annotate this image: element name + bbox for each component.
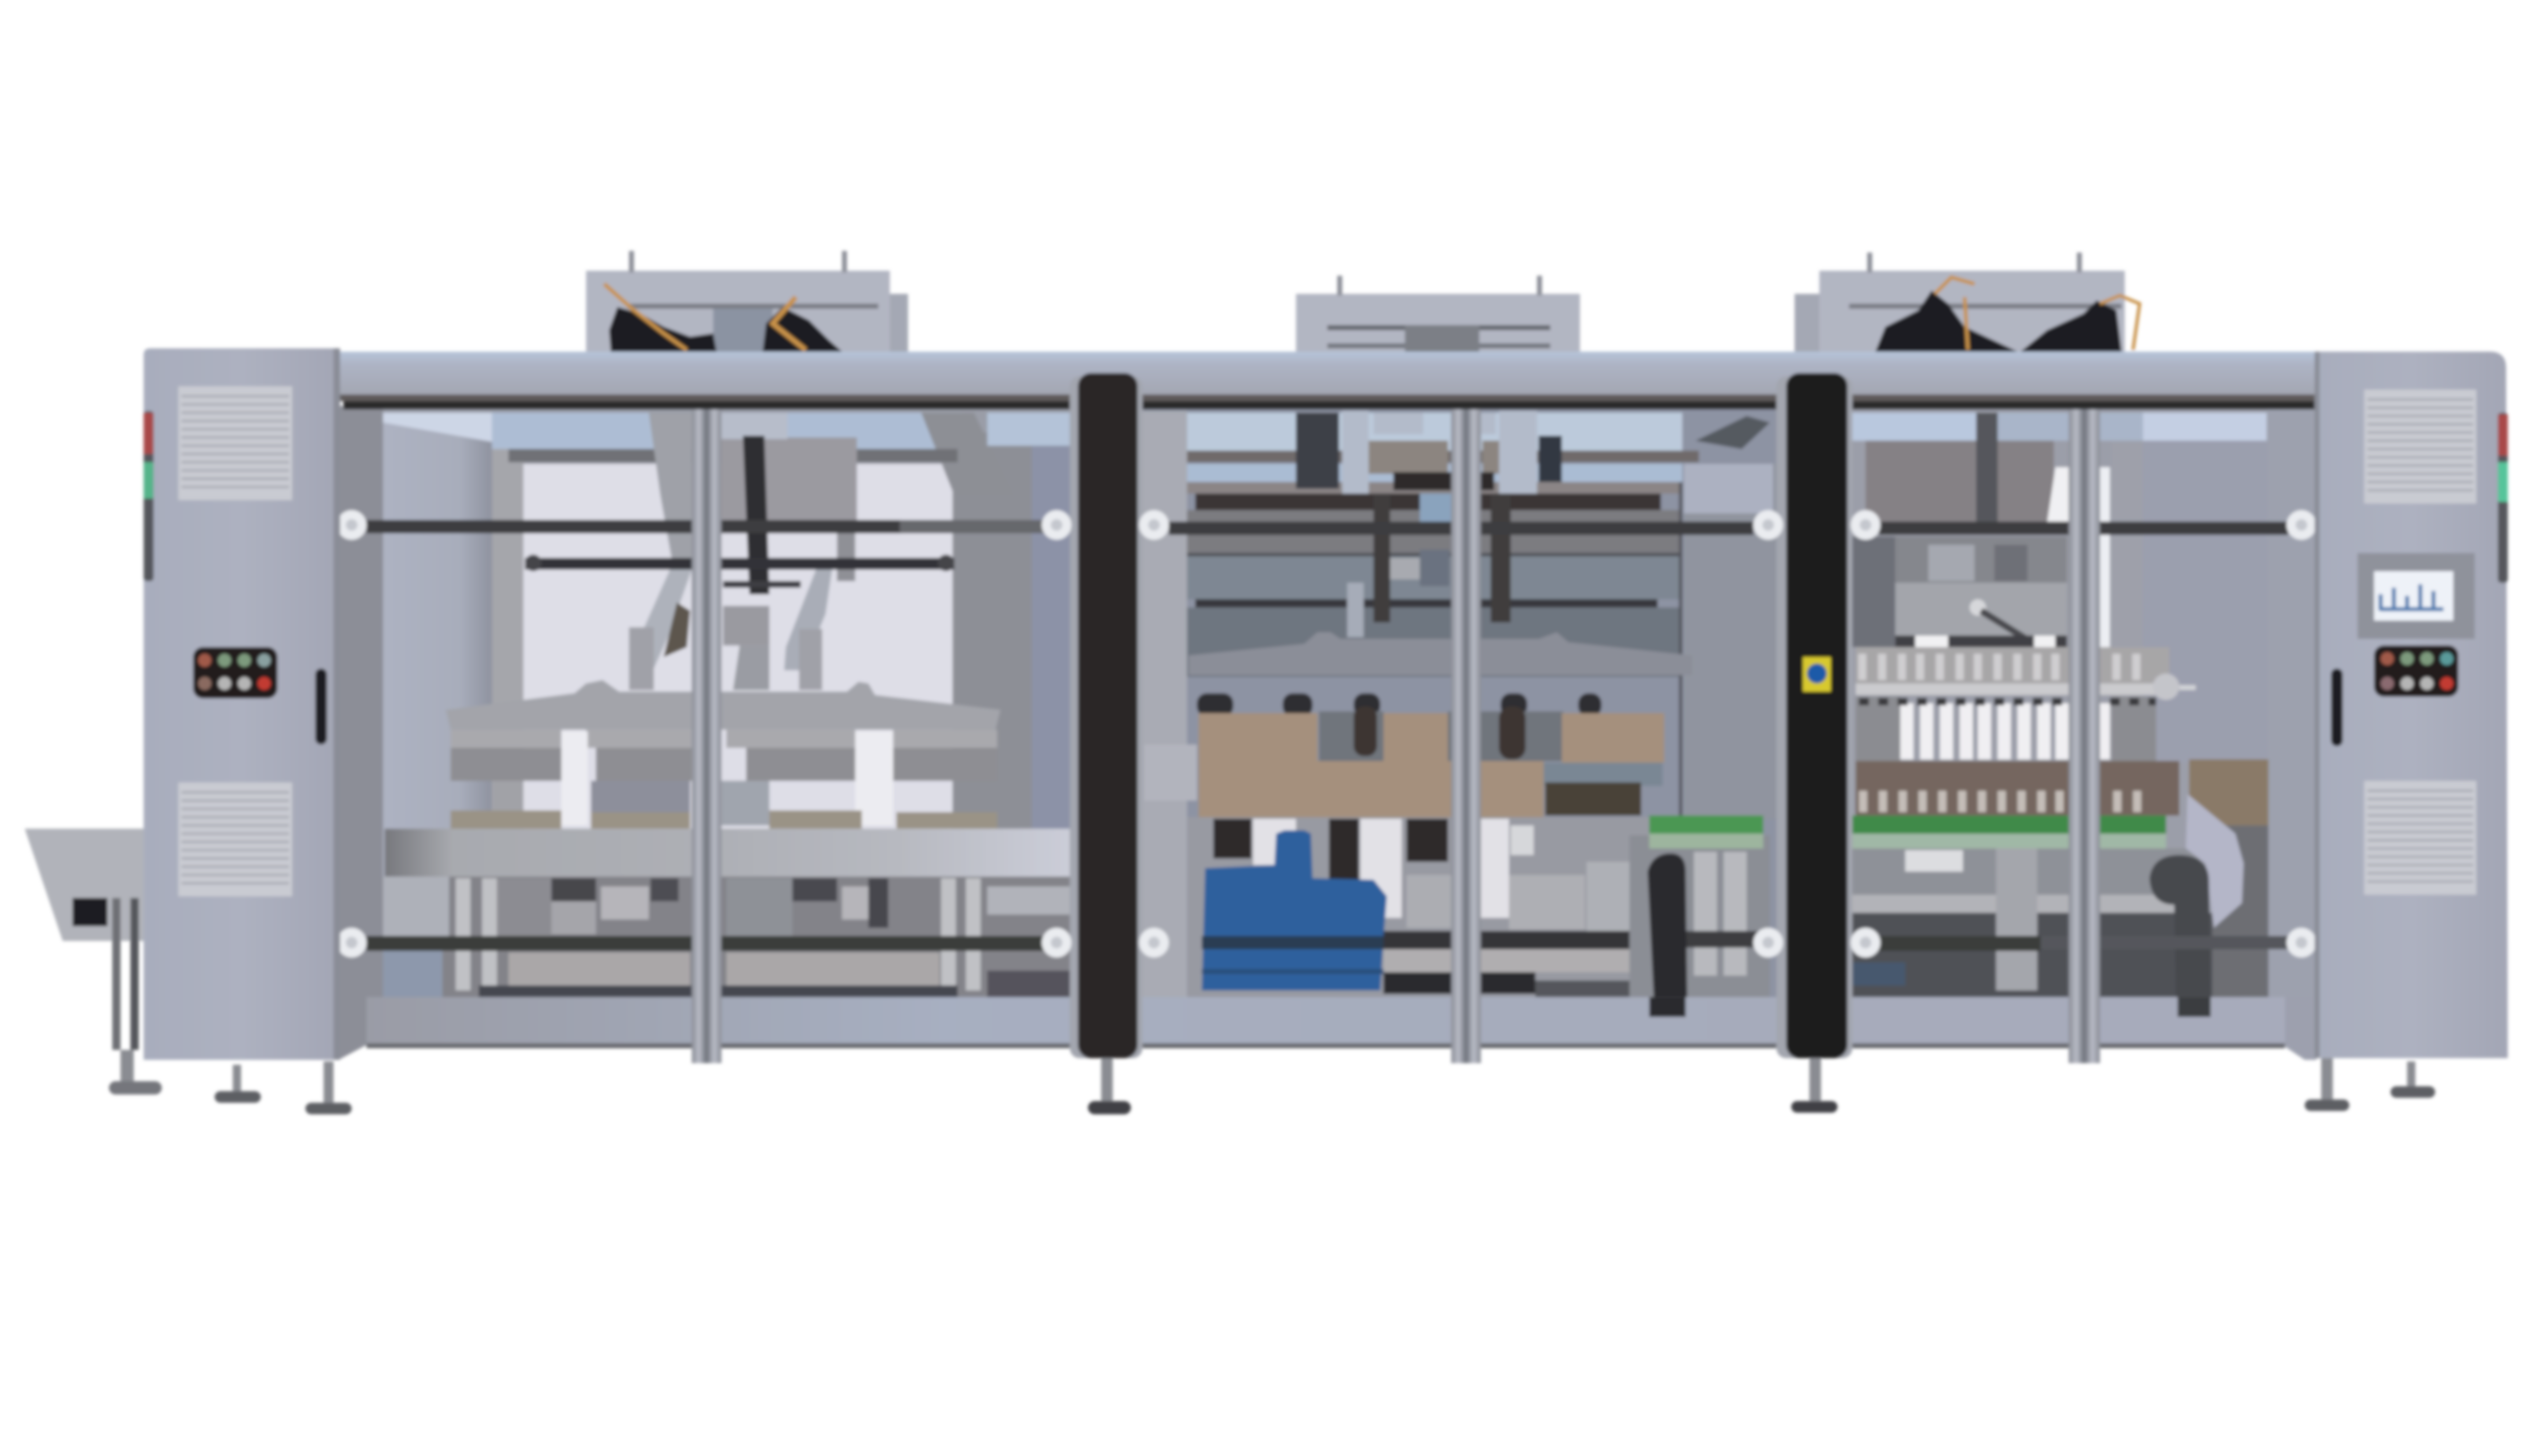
light band	[1853, 895, 2174, 913]
vertical pillars	[692, 410, 2100, 1063]
dark machinery	[1853, 913, 2242, 997]
tooth band	[450, 730, 997, 748]
interior: left section	[338, 406, 1073, 1004]
comb teeth	[1862, 654, 2136, 680]
bolts	[337, 510, 2316, 958]
pale spots	[1859, 791, 2141, 812]
right hopper arm	[837, 525, 855, 581]
brush right lower overlay	[2178, 997, 2210, 1017]
bottom beam	[367, 997, 2285, 1048]
lower machinery	[1853, 848, 2199, 997]
table	[385, 829, 1070, 878]
hopper body	[721, 437, 857, 527]
left cabinet	[144, 348, 340, 1060]
actuator block	[1895, 536, 2067, 583]
dark columns	[1213, 819, 1448, 880]
upper cross bar	[509, 449, 958, 462]
angled plate	[2186, 794, 2244, 928]
top beam	[338, 352, 2320, 410]
top module: right	[1794, 253, 2140, 352]
brush left lower overlay	[1649, 997, 1686, 1017]
right frames	[1630, 835, 1770, 997]
cylinder	[1976, 413, 1998, 523]
lower machinery dark	[1536, 981, 1651, 997]
brown lower	[1856, 761, 2179, 815]
button panel	[193, 647, 278, 698]
left hopper arm	[649, 413, 692, 570]
upper platform	[1189, 632, 1692, 675]
dark box	[1545, 783, 1641, 815]
rod right segment	[2041, 936, 2288, 949]
comb rack band	[1856, 684, 2173, 695]
right wall	[2143, 441, 2267, 763]
door handle	[315, 668, 327, 745]
vertical cylinder	[743, 436, 770, 595]
middle light panel	[1407, 875, 1479, 928]
lower background	[1187, 817, 1682, 999]
lower guard rod	[525, 558, 954, 570]
manifold cluster	[2153, 673, 2179, 700]
vent bottom	[178, 783, 292, 896]
diagonal strut	[1981, 611, 2034, 644]
white gap below platform	[561, 732, 893, 826]
white label box	[1905, 850, 1963, 872]
signal light	[144, 411, 154, 581]
centre lower block	[721, 781, 770, 826]
light top plates	[1342, 411, 1537, 493]
comb hooks	[1859, 701, 2156, 703]
cardboard top	[1199, 713, 1664, 763]
brown carton	[2189, 759, 2269, 826]
slanted strut	[1695, 416, 1770, 449]
linkage arms	[1374, 493, 1390, 622]
lower chain	[1383, 972, 1536, 994]
light column	[1996, 845, 2037, 990]
blue motor piece	[1853, 963, 1905, 985]
pivot	[1970, 599, 1986, 616]
top module: middle	[1296, 276, 1580, 352]
left lower link	[636, 561, 692, 670]
green belt	[1649, 815, 1763, 834]
top module: left	[586, 251, 908, 352]
interior: middle section	[1143, 406, 1790, 1017]
centre lower support	[733, 646, 770, 690]
small whites	[1511, 826, 1533, 855]
black post right	[1776, 373, 1853, 1058]
green belt lower	[1649, 834, 1763, 848]
blue cylinder	[1420, 493, 1453, 528]
conveyor chain	[1383, 931, 1651, 949]
comb rack top	[1856, 647, 2170, 684]
cardboard lower band	[1199, 761, 1544, 817]
rod faded part	[900, 520, 1045, 533]
carton gaps	[1319, 711, 1563, 761]
right wall	[1684, 464, 1783, 819]
feeder chute	[25, 829, 144, 941]
cardboard strips	[450, 810, 997, 829]
signal light	[2498, 413, 2508, 583]
HMI touch screen	[2358, 553, 2475, 639]
white strip	[2100, 467, 2110, 649]
upper platform	[446, 680, 1001, 730]
short rod	[723, 581, 801, 587]
centre light block	[1390, 558, 1423, 579]
lower hanging block	[591, 781, 690, 824]
button panel	[2374, 646, 2458, 697]
vent top	[178, 386, 292, 500]
guard rods upper	[367, 520, 2288, 535]
hanging boxes	[450, 748, 997, 781]
chain light plate	[1383, 949, 1648, 972]
white wedge	[2047, 467, 2068, 522]
dark actuator left	[1296, 413, 1339, 489]
blue motor	[1202, 830, 1387, 990]
hopper dark base	[1393, 472, 1494, 490]
right wall column	[2111, 441, 2143, 771]
dark bar	[1895, 635, 2067, 647]
grey supports	[493, 781, 523, 826]
yellow switch	[1803, 657, 1831, 692]
centre block	[723, 606, 770, 646]
light handle frame	[1144, 745, 1197, 801]
feet	[109, 1050, 2435, 1114]
centre grey block	[1420, 550, 1450, 586]
comb rods grey	[1856, 697, 2156, 761]
side strips	[338, 406, 2316, 1060]
vent bottom	[2364, 781, 2476, 895]
vertical stub	[1347, 583, 1364, 637]
actuator body	[1895, 583, 2067, 637]
right link	[784, 558, 834, 670]
green belt lower	[1853, 834, 2166, 848]
green belt	[1853, 815, 2166, 834]
black brush	[1648, 853, 1687, 1017]
chute support pipes	[112, 898, 139, 1050]
dark actuator right	[1539, 436, 1562, 482]
left dark link	[664, 603, 690, 657]
right gray	[2213, 826, 2269, 997]
conveyor frame	[1544, 763, 1662, 786]
arches	[1197, 693, 1601, 716]
left dark zone	[1853, 536, 1895, 647]
black post left	[1070, 373, 1143, 1058]
thin frame line	[1679, 482, 1682, 821]
rod knobs	[525, 555, 954, 571]
vent top	[2364, 390, 2476, 504]
door handle	[2331, 668, 2342, 746]
interior: right section	[1849, 406, 2316, 1015]
white blocks	[1253, 819, 1509, 918]
hopper	[1369, 441, 1448, 474]
hopper	[1866, 441, 2054, 523]
lower machinery	[385, 877, 1070, 999]
hopper top plates	[721, 413, 788, 439]
right cabinet	[2315, 352, 2508, 1058]
white strips	[1900, 703, 2110, 759]
brush	[2149, 855, 2210, 1015]
guard rods lower	[367, 936, 2041, 951]
right lower column	[799, 629, 822, 690]
dark openings	[1354, 707, 1525, 759]
left lower column	[629, 627, 654, 690]
manifold tip	[2179, 685, 2196, 690]
white tabs	[1915, 635, 2055, 647]
